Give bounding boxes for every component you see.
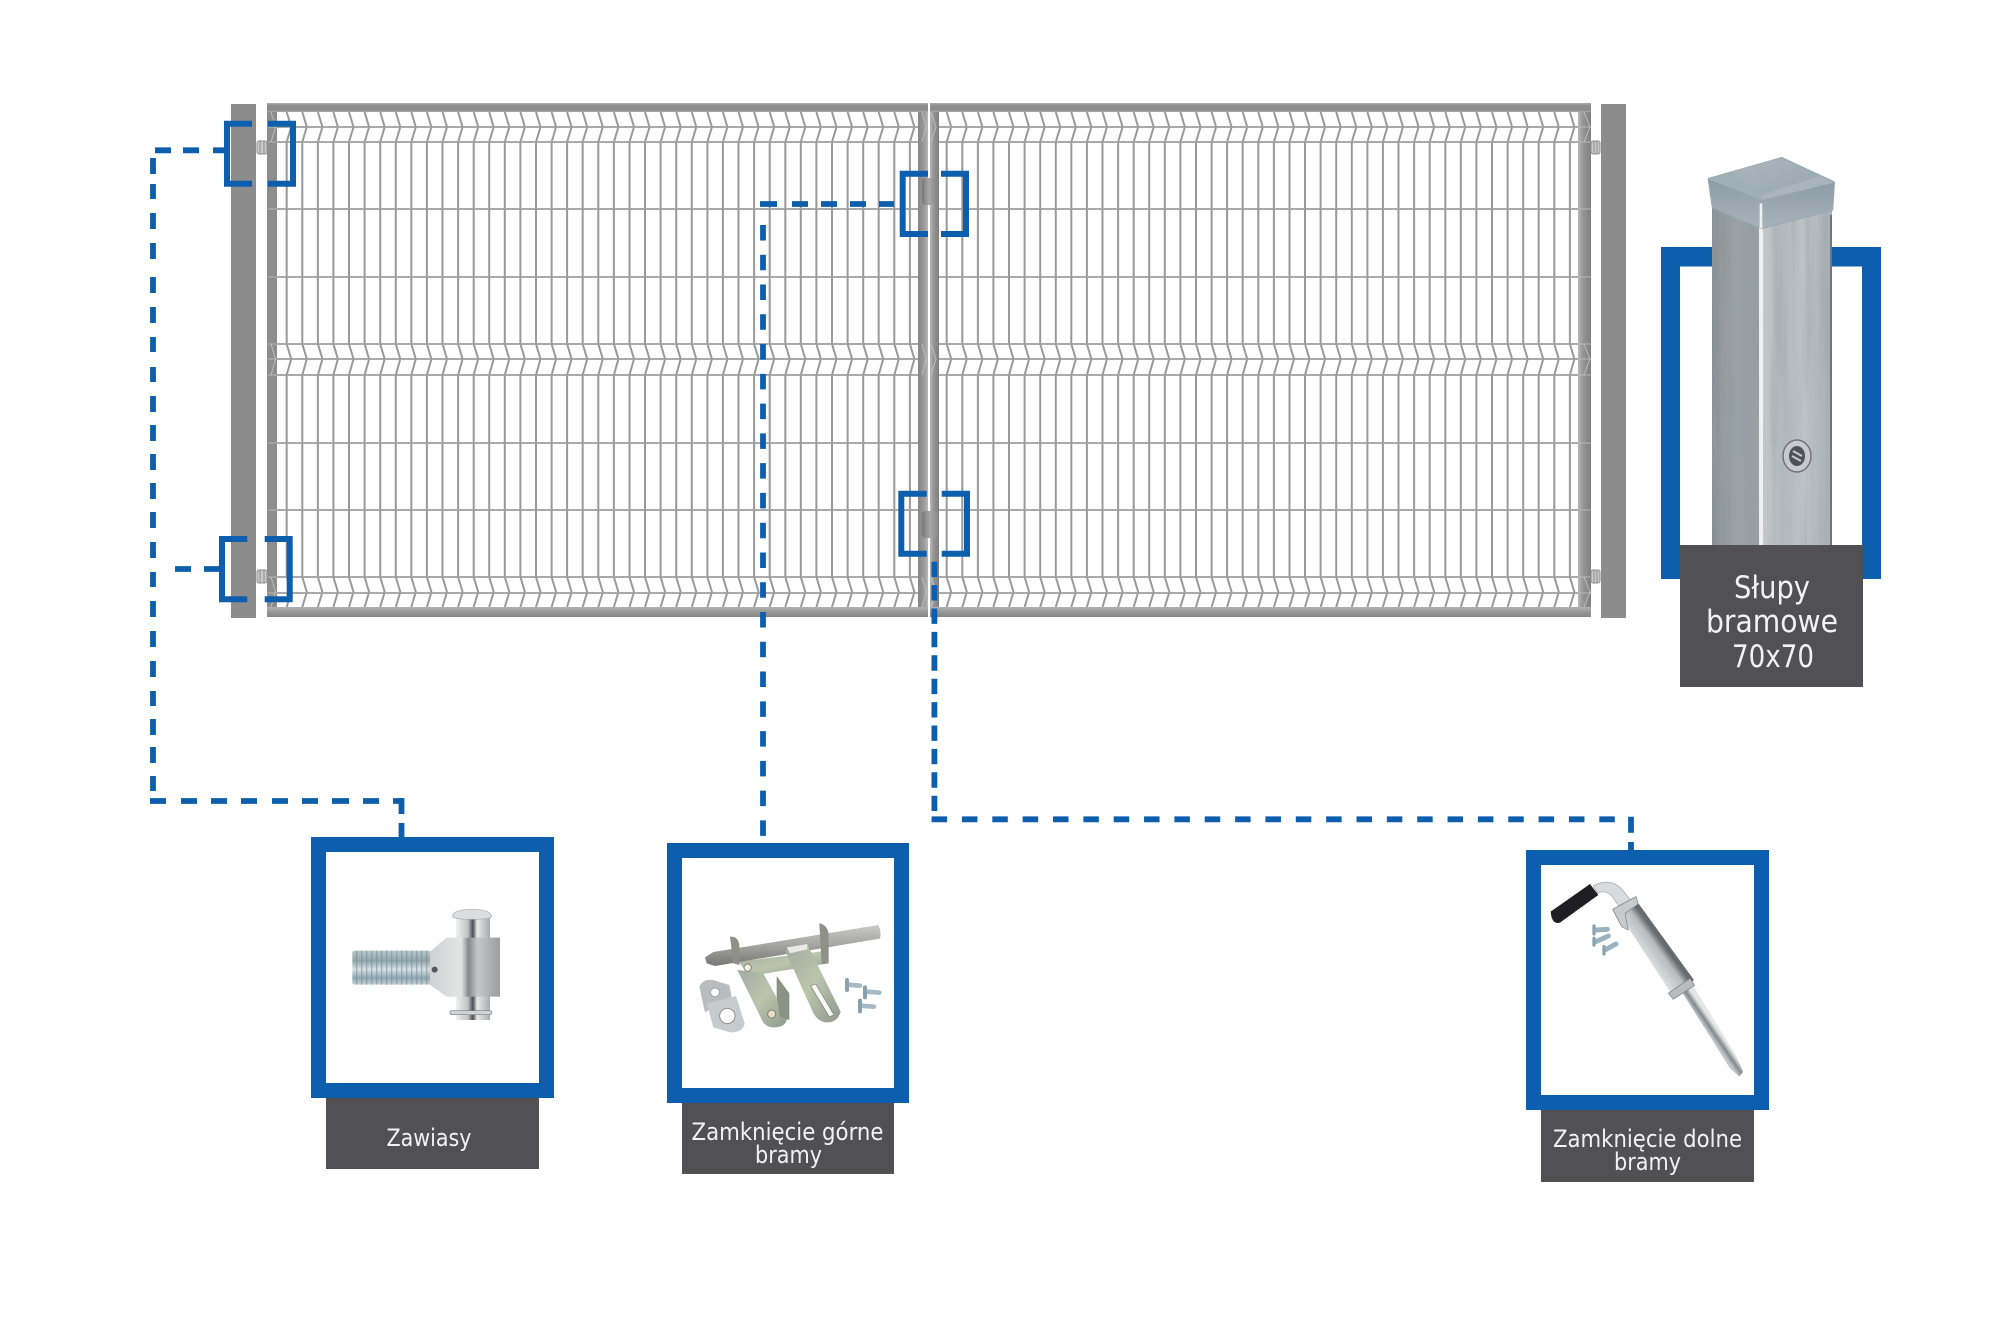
dashed connector: top latch (760, 204, 894, 836)
double gate (257, 103, 1600, 617)
blue frame (674, 850, 902, 1096)
label: Zamknięcie dolne bramy: Zamknięcie dolne (1553, 1125, 1742, 1153)
hinge bottom left (257, 570, 267, 583)
left gate post (231, 104, 256, 618)
dashed connector: bottom latch (932, 562, 1631, 850)
label: Zamknięcie górne bramy (682, 1103, 894, 1174)
blue frame (1534, 858, 1762, 1102)
panel: bottom gate bolt (1534, 858, 1762, 1182)
callout brackets (222, 124, 967, 599)
hinge bottom right (1591, 570, 1600, 583)
left leaf (267, 103, 928, 617)
dashed connector: hinges (150, 150, 404, 837)
bracket: top latch (903, 174, 966, 234)
hinge photo (352, 909, 500, 1020)
hinge top right (1591, 141, 1600, 154)
label: Słupy bramowe 70x70 (1680, 545, 1863, 687)
label: Zamknięcie górne bramy: Zamknięcie górne (692, 1118, 884, 1146)
label: Zawiasy (326, 1098, 539, 1169)
upper latch on fence (922, 178, 936, 205)
panel: top gate bolt (674, 850, 902, 1174)
blue frame (318, 844, 546, 1090)
hinge top left (257, 141, 267, 154)
label: Zamknięcie górne bramy: bramy (755, 1141, 822, 1169)
label: Zamknięcie dolne bramy: bramy (1614, 1148, 1681, 1176)
bolt photo (699, 923, 881, 1032)
label: Słupy bramowe 70x70: 70x70 (1732, 639, 1814, 675)
post cap (1708, 158, 1834, 228)
panel: gate posts photo (1661, 158, 1881, 687)
panel: hinge (318, 844, 546, 1169)
label: Zamknięcie dolne bramy (1541, 1110, 1754, 1182)
lower latch on fence (922, 511, 938, 538)
label: Słupy bramowe 70x70: bramowe (1706, 604, 1838, 640)
post photo (1708, 158, 1834, 547)
label: Słupy bramowe 70x70: Słupy (1734, 570, 1810, 606)
latch photo (1551, 882, 1743, 1077)
bracket: bottom hinge (222, 539, 290, 599)
label: Zawiasy: Zawiasy (386, 1124, 472, 1152)
blue frame (1661, 247, 1881, 579)
bracket: bottom latch (901, 494, 967, 554)
bracket: top hinge (227, 124, 293, 184)
right leaf (930, 103, 1591, 617)
right gate post (1601, 104, 1626, 618)
